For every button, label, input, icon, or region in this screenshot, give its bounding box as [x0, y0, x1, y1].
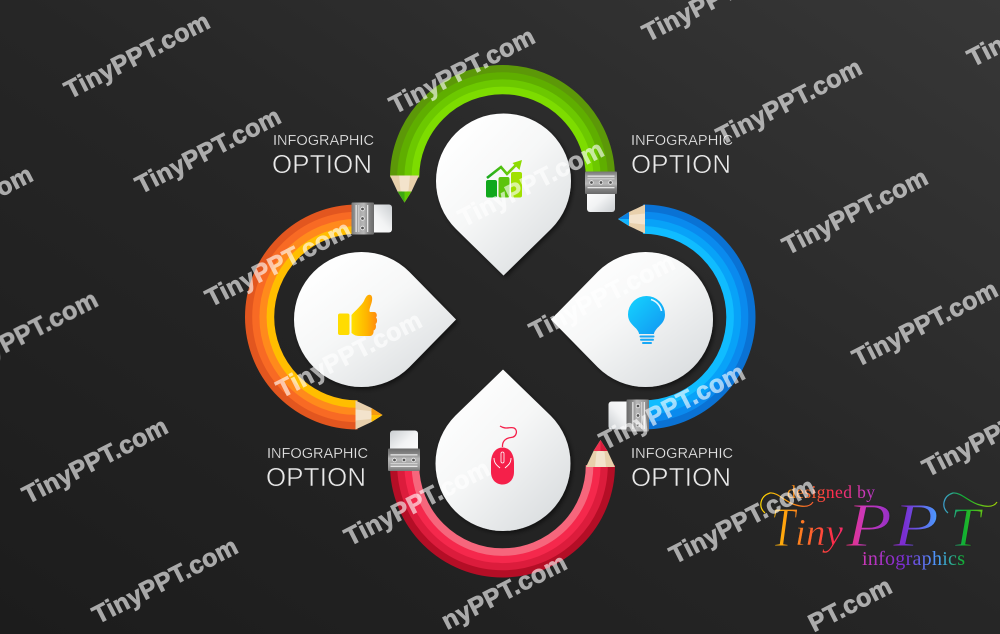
- watermarks: TinyPPT.com: [778, 163, 933, 261]
- watermarks: TinyPPT.com: [665, 472, 820, 570]
- green pencil body: [394, 69, 611, 178]
- panel: orange drop: [294, 252, 456, 387]
- watermarks: TinyPPT.com: [525, 248, 680, 346]
- watermarks: nyPPT.com: [437, 548, 572, 634]
- watermarks: TinyPPT.com: [595, 358, 750, 456]
- blue pencil ferrule and eraser: [608, 400, 649, 432]
- logo: designed by TinyPPT infographics: [761, 482, 997, 570]
- watermarks: TinyPPT.com: [60, 7, 215, 105]
- green pencil ferrule and eraser: [585, 172, 617, 212]
- logo: designed by TinyPPT infographics: T: [771, 497, 798, 559]
- icon: computer mouse: [491, 426, 516, 484]
- logo: designed by TinyPPT infographics: designed by: [787, 482, 875, 502]
- heading: bottom left option: INFOGRAPHIC: [267, 446, 368, 462]
- heading: bottom right option: OPTION: [631, 464, 731, 492]
- watermarks: TinyPPT.com: [454, 135, 609, 233]
- icon: thumbs up: [338, 295, 377, 336]
- red pencil tip: [586, 440, 615, 467]
- watermarks: TinyPPT.com: [272, 306, 427, 404]
- blue pencil body: [643, 208, 752, 426]
- panel: green drop: [436, 114, 571, 276]
- watermarks: TinyPPT.com: [201, 215, 356, 313]
- orange pencil tip: [356, 400, 382, 430]
- blue pencil tip: [618, 204, 645, 234]
- watermarks: TinyPPT.com: [848, 275, 1000, 373]
- heading: top right option: [631, 133, 733, 179]
- heading: top left option: INFOGRAPHIC: [273, 133, 374, 149]
- red pencil body: [394, 465, 611, 574]
- panel: red drop: [435, 370, 570, 531]
- red pencil ferrule and eraser: [388, 430, 420, 471]
- heading: top left option: [272, 133, 374, 179]
- watermarks: TinyPPT.com: [88, 532, 243, 630]
- panel: red pencil: [388, 430, 615, 574]
- green pencil tip: [390, 176, 419, 202]
- panel: blue drop: [551, 252, 713, 387]
- heading: bottom left option: [266, 446, 368, 492]
- heading: top right option: OPTION: [631, 151, 731, 179]
- panel: green pencil: [390, 69, 617, 212]
- heading: top right option: INFOGRAPHIC: [631, 133, 733, 149]
- panel: blue pencil: [608, 204, 752, 432]
- watermarks: TinyPPT.com: [131, 102, 286, 200]
- heading: bottom right option: [631, 446, 733, 492]
- logo: designed by TinyPPT infographics: T: [950, 497, 984, 559]
- watermarks: TinyPPT.com: [385, 22, 540, 120]
- logo: designed by TinyPPT infographics: P: [845, 492, 892, 560]
- orange pencil ferrule and eraser: [352, 202, 392, 234]
- orange pencil body: [249, 208, 358, 426]
- heading: top left option: OPTION: [272, 151, 372, 179]
- watermarks: TinyPPT.com: [712, 53, 867, 151]
- icon: light bulb: [628, 296, 665, 344]
- heading: bottom left option: OPTION: [266, 464, 366, 492]
- watermarks: TinyPPT.com: [18, 412, 173, 510]
- icon: growth chart: [486, 160, 522, 198]
- heading: bottom right option: INFOGRAPHIC: [631, 446, 733, 462]
- panel: orange pencil: [249, 202, 392, 430]
- logo: designed by TinyPPT infographics: P: [892, 492, 939, 560]
- watermarks: TinyPPT.com: [340, 454, 495, 552]
- logo: designed by TinyPPT infographics: infographics: [862, 548, 965, 570]
- logo: designed by TinyPPT infographics: iny: [795, 512, 843, 554]
